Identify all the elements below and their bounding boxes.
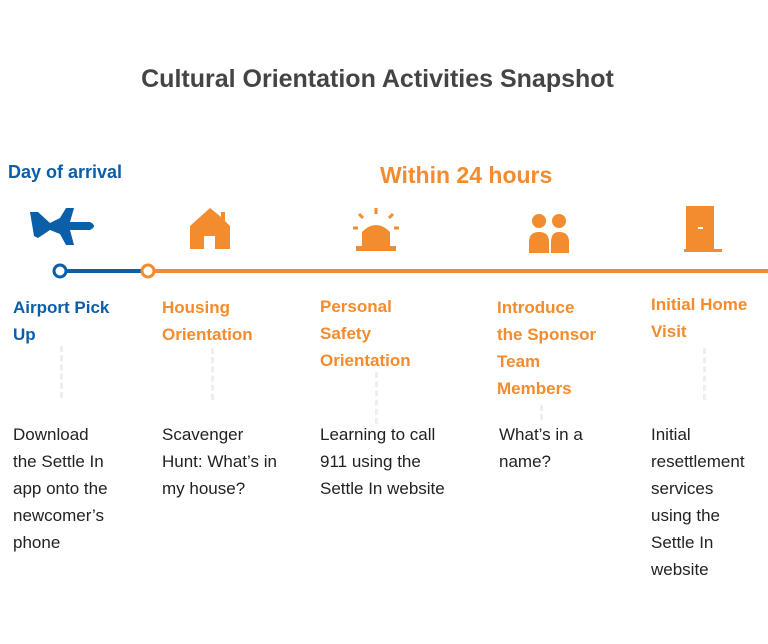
step 5 heading: Initial Home: [651, 295, 747, 314]
step 2 heading: [162, 298, 253, 344]
step 4 heading: Members: [497, 379, 572, 398]
step 3 text: Learning to call: [320, 425, 435, 444]
step 1 text: [13, 425, 108, 552]
step 5 heading: Visit: [651, 322, 687, 341]
step 1 text: the Settle In: [13, 452, 104, 471]
step 5 text: services: [651, 479, 713, 498]
timeline: [30, 206, 768, 278]
step 1 text: Download: [13, 425, 89, 444]
step 1 heading: [13, 298, 110, 344]
step 3 text: [320, 425, 445, 498]
step 1 text: app onto the: [13, 479, 108, 498]
step 4 text: name?: [499, 452, 551, 471]
step 2 text: Scavenger: [162, 425, 243, 444]
step 4 heading: Introduce: [497, 298, 574, 317]
step 4 text: [499, 425, 583, 471]
step 3 heading: Orientation: [320, 351, 411, 370]
step 5 text: [651, 425, 745, 579]
label: within 24 hours: Within 24 hours: [380, 162, 552, 188]
step 5 text: resettlement: [651, 452, 745, 471]
step 2 text: Hunt: What’s in: [162, 452, 277, 471]
step 5 text: Initial: [651, 425, 691, 444]
step 2 text: my house?: [162, 479, 245, 498]
title: Cultural Orientation Activities Snapshot: [141, 65, 614, 93]
step 5 text: website: [651, 560, 709, 579]
step 3 text: 911 using the: [320, 452, 421, 471]
step 4 heading: the Sponsor: [497, 325, 596, 344]
step 3 heading: [320, 297, 411, 370]
step 1 text: phone: [13, 533, 60, 552]
icon: people: [529, 214, 569, 253]
step 4 heading: Team: [497, 352, 540, 371]
step 1 heading: Airport Pick: [13, 298, 109, 317]
label: day of arrival: Day of arrival: [8, 162, 122, 182]
icon: airplane: [30, 208, 94, 245]
step 5 text: using the: [651, 506, 720, 525]
step 4 heading: [497, 298, 596, 398]
step 1 heading: Up: [13, 325, 36, 344]
step 2 text: [162, 425, 277, 498]
icon: siren: [353, 208, 399, 251]
step 1 text: newcomer’s: [13, 506, 104, 525]
step 3 text: Settle In website: [320, 479, 445, 498]
step 2 heading: Housing: [162, 298, 230, 317]
step 5 text: Settle In: [651, 533, 713, 552]
step 2 heading: Orientation: [162, 325, 253, 344]
icon: house: [190, 208, 230, 249]
step 4 text: What’s in a: [499, 425, 583, 444]
step 5 heading: [651, 295, 747, 341]
icon: door: [684, 206, 722, 252]
step 3 heading: Safety: [320, 324, 371, 343]
step 3 heading: Personal: [320, 297, 392, 316]
